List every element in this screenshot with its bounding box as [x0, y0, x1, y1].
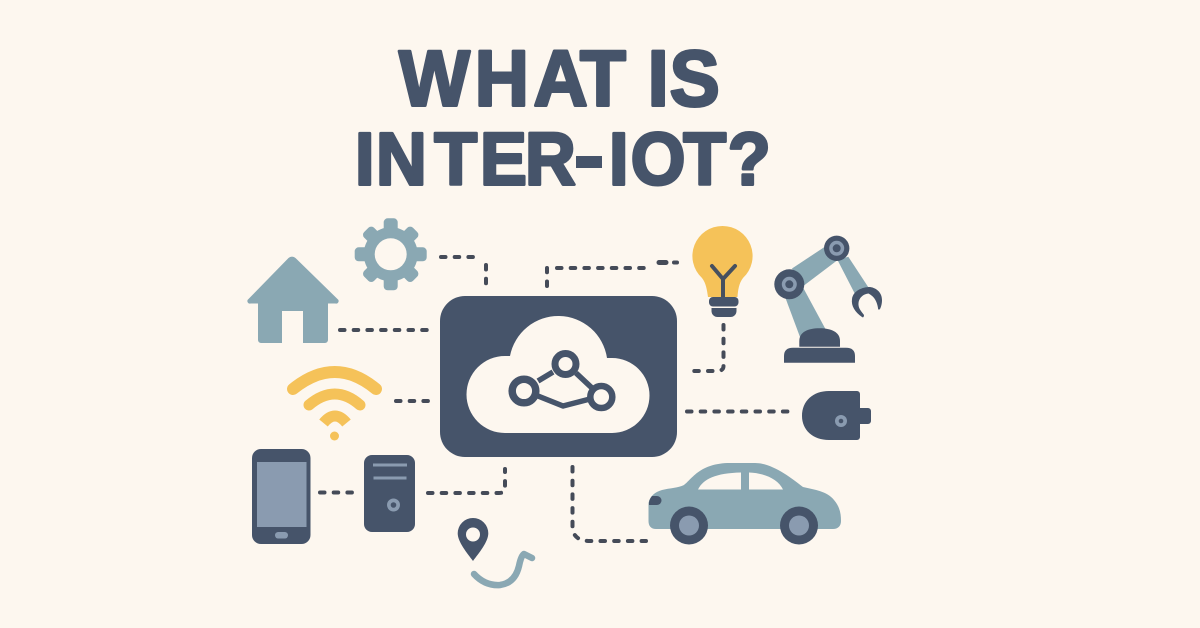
- icon: car: [648, 463, 841, 544]
- connector: hub to plug: [687, 410, 794, 414]
- connector: gear to hub: [441, 257, 486, 287]
- icon: robot arm: [774, 236, 882, 363]
- icon: plug device: [802, 391, 871, 440]
- connector: hub to car: [572, 467, 646, 541]
- icon: wifi: [293, 372, 376, 440]
- icon: house: [247, 257, 339, 343]
- icon: cloud: [466, 316, 650, 433]
- title: WHAT IS: [399, 35, 720, 123]
- connector: bulb to hub: [686, 325, 724, 371]
- connector: server to hub: [428, 469, 505, 493]
- icon: location pin: [458, 518, 488, 561]
- icon: curved arrow: [474, 554, 532, 585]
- icon: gear: [355, 218, 427, 290]
- icon: smartphone: [252, 449, 310, 544]
- icon: server tower: [364, 455, 415, 532]
- connector: house to hub: [340, 328, 428, 332]
- icon: light bulb: [692, 226, 753, 317]
- title: [355, 35, 771, 201]
- connector: hub to bulb upper: [547, 262, 677, 286]
- icon: network nodes: [512, 354, 612, 408]
- connector: wifi to hub: [396, 399, 429, 403]
- connector: phone to server: [320, 490, 354, 494]
- central hub panel: [440, 296, 677, 457]
- title: INTER-IOT?: [355, 116, 771, 201]
